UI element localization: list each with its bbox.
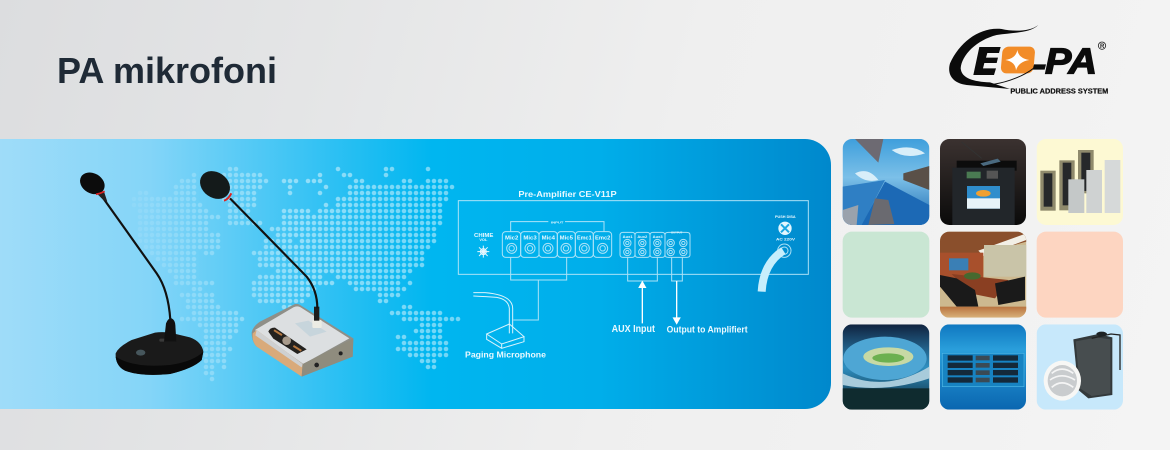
diagram labels: Emc1	[577, 236, 592, 242]
diagram labels: VOL	[479, 238, 487, 242]
diagram labels: Pre-Amplifier CE-V11P	[518, 190, 617, 199]
tile: peach blank	[1037, 232, 1123, 318]
diagram labels: PUSH DISA	[775, 215, 796, 219]
diagram labels: Mic4	[542, 236, 555, 242]
diagram labels: Mic3	[523, 236, 537, 242]
diagram labels: Paging Microphone	[465, 349, 546, 359]
diagram labels: Mic2	[505, 236, 518, 242]
tile: skyscrapers	[843, 139, 929, 225]
icon: push disa button	[778, 222, 792, 235]
diagram labels: Emc2	[595, 236, 610, 242]
wiring diagram: Pre-Amplifier CE-V11P	[458, 190, 809, 359]
diagram labels: OUTPUT	[671, 231, 683, 235]
logo: CE-PA public address system	[949, 25, 1109, 96]
panel: blue banner	[0, 139, 831, 409]
tile: conference room	[940, 232, 1026, 318]
tile grid	[842, 139, 1123, 410]
diagram labels: AC 220V	[776, 237, 795, 242]
diagram labels: Output to Amplifiert	[667, 325, 748, 335]
logo: CE-PA public address system: PUBLIC ADDRESS SYSTEM	[1010, 89, 1109, 96]
logo: CE-PA public address system: PA	[1045, 41, 1097, 82]
icon: chime knob	[477, 246, 489, 258]
microphones	[80, 171, 354, 377]
diagram labels: CHIME	[474, 233, 494, 239]
tile: amplifier stack	[940, 324, 1026, 410]
diagram labels: Aux2	[637, 234, 648, 239]
title: PA mikrofoni	[57, 50, 277, 91]
tile: wall and ceiling speakers	[1037, 324, 1123, 410]
diagram labels: Aux3	[653, 234, 663, 239]
diagram labels: Mic5	[560, 236, 573, 242]
world map of dots	[134, 166, 460, 382]
black gooseneck microphone	[76, 168, 203, 375]
arrow: AUX input	[639, 282, 645, 323]
diagram labels: Aux1	[623, 234, 633, 239]
diagram labels: AUX Input	[612, 324, 656, 335]
tile: column speakers	[1037, 139, 1123, 225]
tile: stadium	[843, 324, 929, 410]
tile: rack system	[940, 139, 1026, 225]
diagram labels	[465, 190, 796, 359]
diagram labels: INPUT	[551, 220, 564, 224]
logo: CE-PA public address system: R	[1100, 44, 1105, 50]
tile: green blank	[843, 232, 929, 318]
silver paging desk microphone	[195, 165, 353, 377]
arrow: output to amplifier	[674, 281, 680, 323]
paging microphone drawing	[473, 293, 524, 348]
power cable	[762, 251, 783, 292]
